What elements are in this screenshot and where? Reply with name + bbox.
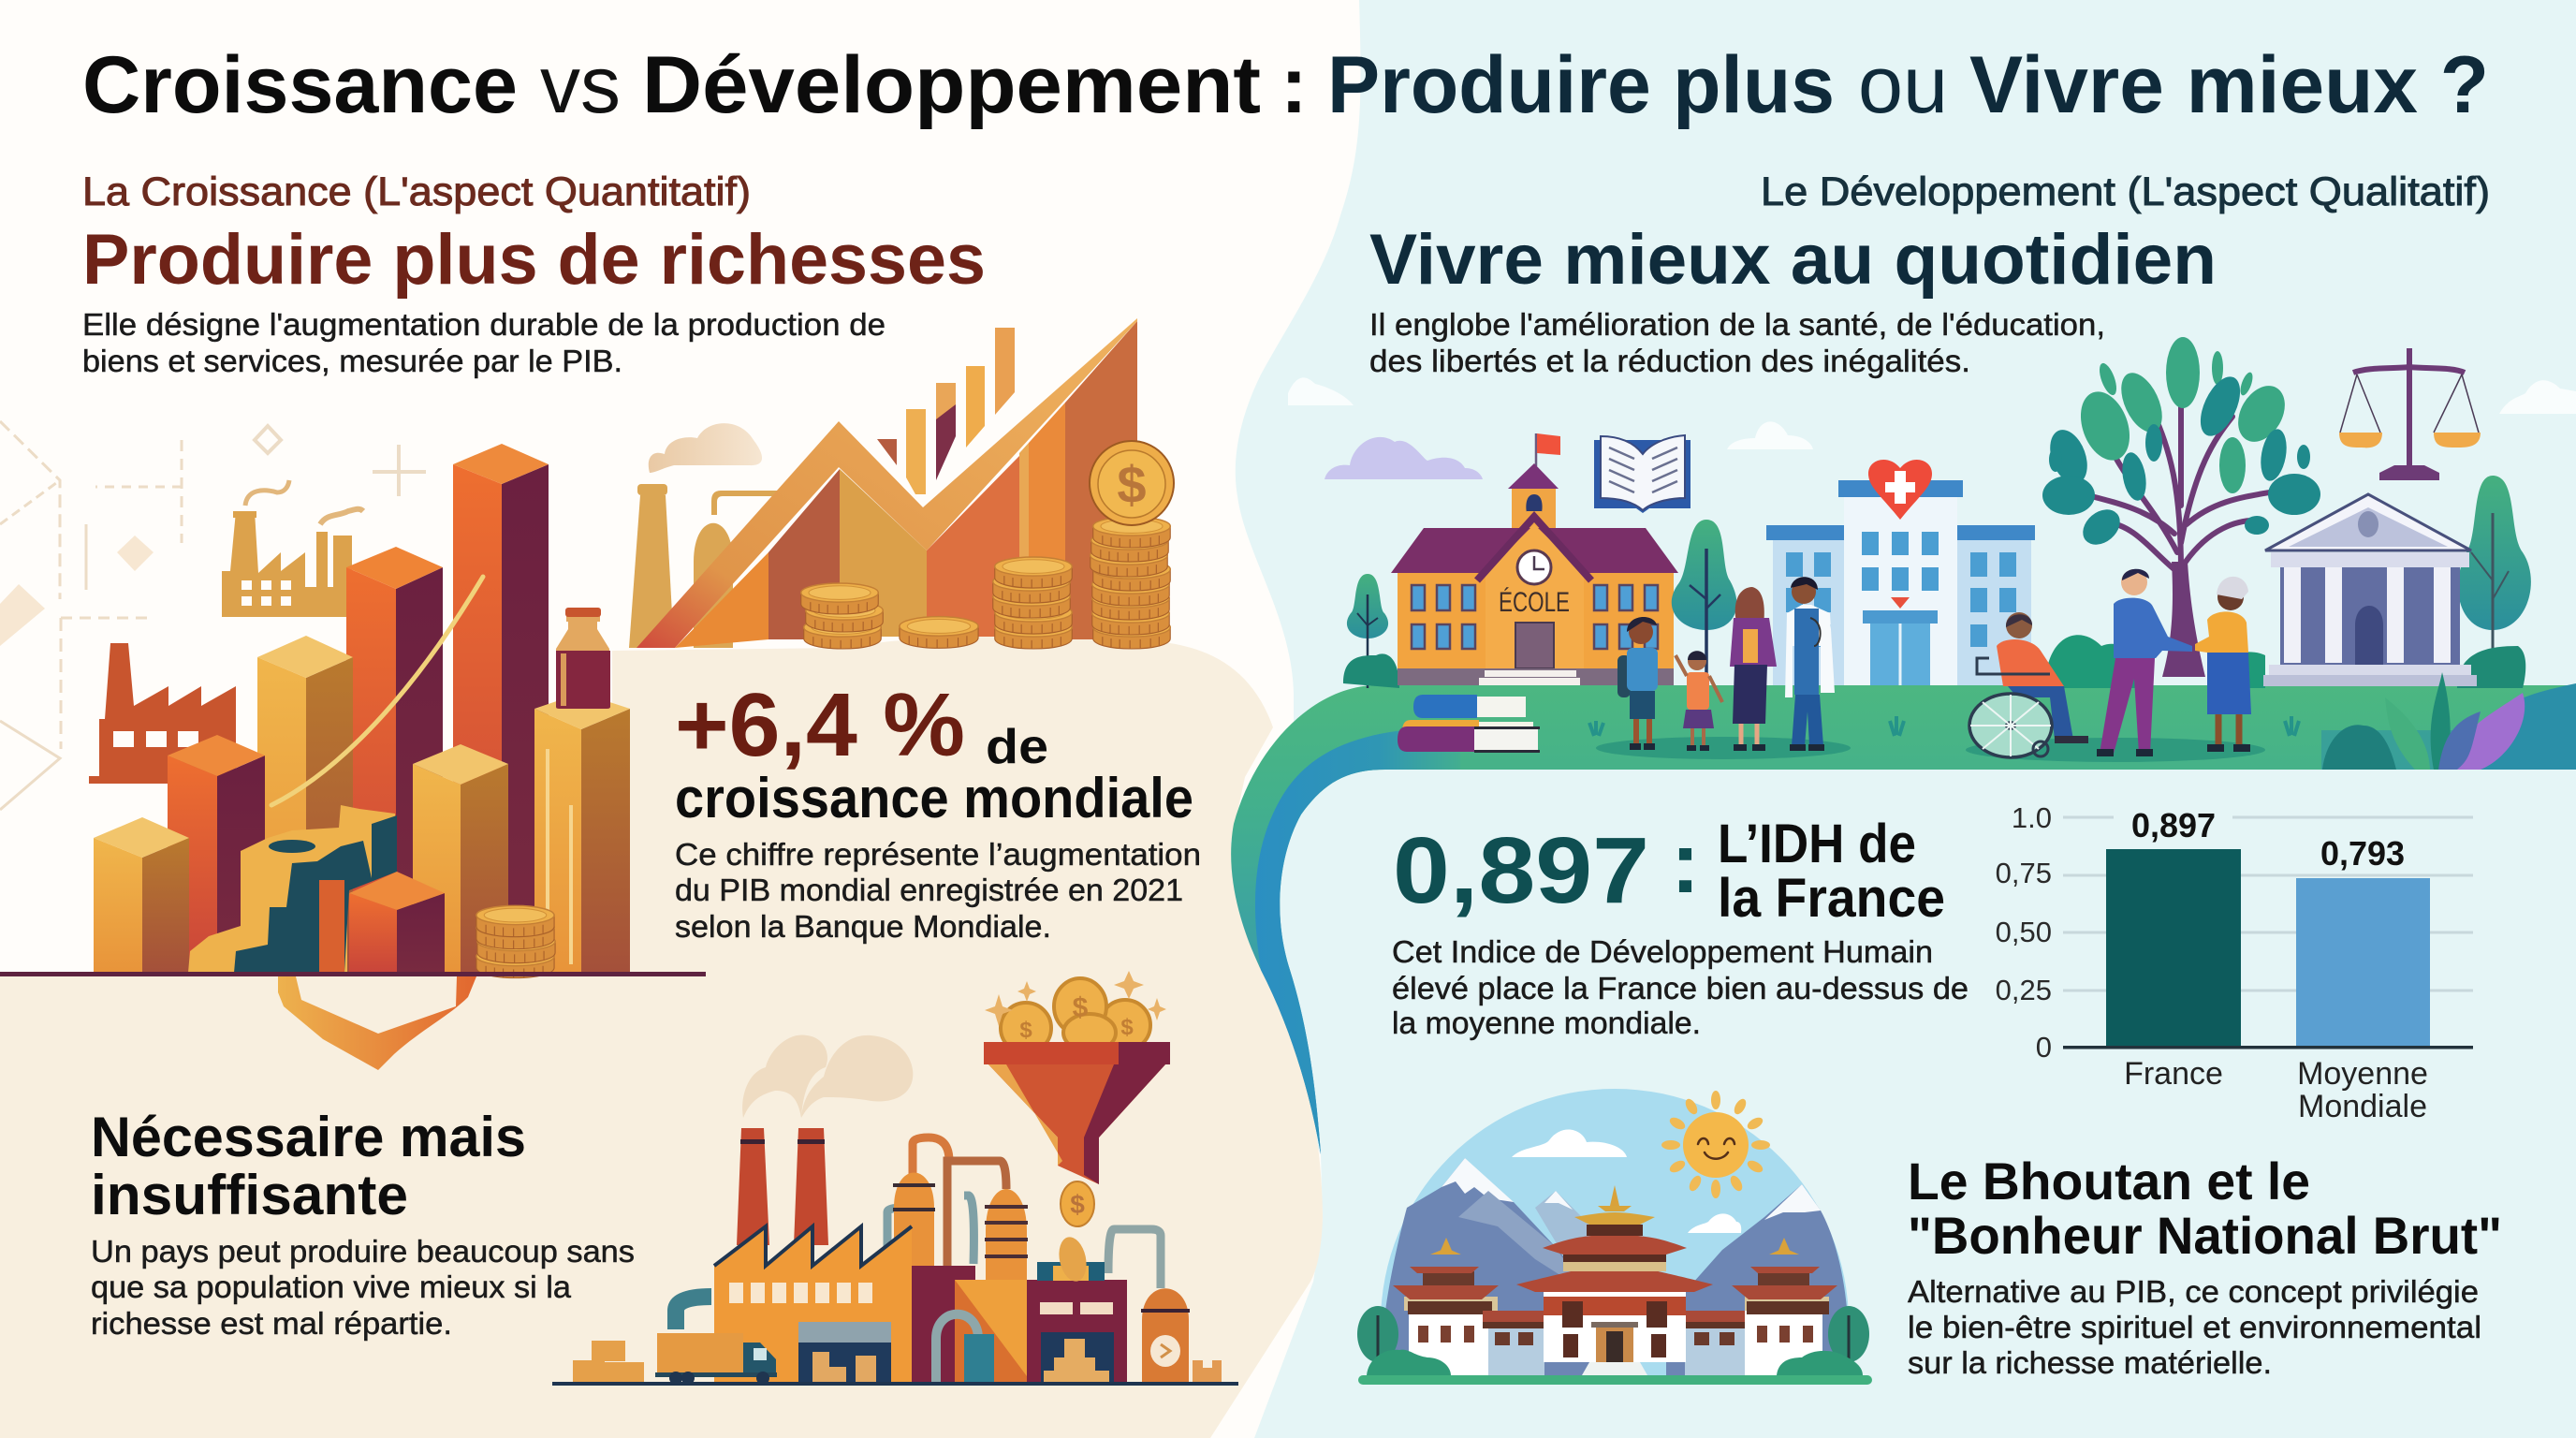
decor: pale diamonds xyxy=(0,536,154,646)
bar: orange front left xyxy=(168,735,265,973)
boxes xyxy=(573,1341,1222,1382)
walls xyxy=(1398,573,1674,668)
right illustration: clouds xyxy=(1288,377,2576,479)
tanks xyxy=(893,1172,1028,1280)
back areas of arrow xyxy=(1065,321,1137,639)
title: ou xyxy=(1858,40,1948,130)
text block: nécessaire mais insuffisante: Un pays peut produire beaucoup sans xyxy=(91,1235,635,1269)
hospital wings xyxy=(1773,538,1844,685)
hill bottom shade xyxy=(2321,730,2576,770)
bar: second orange xyxy=(346,547,443,973)
falling coin xyxy=(1061,1181,1094,1226)
illustration: grass tufts xyxy=(1589,716,2299,736)
figure: standing man xyxy=(2097,569,2192,756)
illustration: small tree left xyxy=(1343,574,1399,688)
funnel xyxy=(984,1042,1170,1184)
zigzag arrow band xyxy=(637,318,1137,648)
coins in funnel: $ xyxy=(1120,1015,1134,1040)
title: Croissance xyxy=(82,40,518,130)
pipes xyxy=(676,1137,1161,1329)
background: right pale blue side xyxy=(1231,0,2576,1438)
text block: Bhoutan: sur la richesse matérielle. xyxy=(1908,1346,2272,1381)
clouds xyxy=(1512,1129,1627,1157)
text block: Bhoutan: le bien-être spirituel et environnemental xyxy=(1908,1311,2481,1345)
small rising bars xyxy=(877,328,1015,494)
bar: small orange front xyxy=(349,872,445,973)
text block: Bhoutan: Alternative au PIB, ce concept privilégie xyxy=(1908,1275,2479,1310)
illustration: foliage bottom right xyxy=(2322,672,2576,770)
falling coin: $ xyxy=(1070,1190,1085,1219)
title: Produire plus xyxy=(1327,40,1835,130)
illustration: school xyxy=(1391,433,1678,685)
illustration: tree middle xyxy=(1672,520,1736,688)
figure: woman xyxy=(1730,587,1777,751)
central gold and teal shape xyxy=(188,805,397,973)
right heading block: Vivre mieux au quotidien xyxy=(1369,220,2217,300)
left heading block: Produire plus de richesses xyxy=(82,220,986,300)
right wing building xyxy=(1685,1238,1837,1375)
text block: nécessaire mais insuffisante: que sa population vive mieux si la xyxy=(91,1270,571,1305)
stat: +6,4 %: de xyxy=(986,720,1048,774)
figure: girl with backpack xyxy=(1617,617,1658,750)
hill inner blue strip xyxy=(1255,728,1460,1154)
left heading block xyxy=(82,169,986,379)
bar: gold back xyxy=(257,636,353,973)
truck xyxy=(655,1333,777,1385)
figure: child xyxy=(1676,651,1722,751)
bar: moyenne mondiale xyxy=(2296,878,2430,1048)
windows xyxy=(1412,585,1658,649)
illustration: big tree xyxy=(2042,337,2320,677)
text block: nécessaire mais insuffisante: insuffisante xyxy=(91,1164,408,1226)
category labels: Mondiale xyxy=(2298,1089,2427,1124)
y axis labels: 1.0 xyxy=(2012,801,2052,834)
text block: nécessaire mais insuffisante: richesse est mal répartie. xyxy=(91,1307,452,1342)
ground bar xyxy=(1358,1375,1872,1385)
ground line xyxy=(0,972,706,976)
figure: doctor xyxy=(1785,577,1835,751)
sparkles xyxy=(985,971,1166,1026)
icon: open book xyxy=(1594,435,1690,513)
stat: 0,897 IDH: Cet Indice de Développement Humain xyxy=(1392,935,1933,970)
connecting wing left xyxy=(1483,1311,1544,1375)
illustration: people shaking hands and wheelchair xyxy=(1966,569,2265,762)
value labels: 0,793 xyxy=(2320,834,2405,873)
icon: dollar coin: $ xyxy=(1117,455,1147,514)
category labels xyxy=(2124,1056,2428,1124)
title: Développement xyxy=(642,40,1261,130)
icon: heart with cross xyxy=(1868,460,1932,520)
bottle xyxy=(556,608,610,709)
coins in funnel xyxy=(1001,978,1150,1053)
illustration: factory with funnel xyxy=(552,971,1238,1386)
right heading block: des libertés et la réduction des inégalités. xyxy=(1369,345,1970,379)
illustration: gold factory silhouette xyxy=(222,480,363,617)
clock xyxy=(1517,550,1551,584)
school label: ÉCOLE xyxy=(1499,587,1570,618)
coin container on roof xyxy=(1037,1235,1105,1284)
coin stack xyxy=(476,905,555,978)
coins in funnel: $ xyxy=(1073,992,1089,1023)
plum block xyxy=(912,1266,975,1384)
hospital main block xyxy=(1844,496,1957,685)
title: vs xyxy=(540,40,621,130)
illustration: right tree xyxy=(2457,476,2531,688)
single coin xyxy=(900,617,978,648)
coin stack 3 xyxy=(1090,517,1170,649)
title: Vivre mieux ? xyxy=(1969,40,2489,130)
factory ground line xyxy=(552,1382,1238,1386)
y axis labels: 0,75 xyxy=(1996,857,2052,889)
coins in funnel: $ xyxy=(1019,1018,1032,1043)
coin stack 2 xyxy=(993,557,1072,649)
stat: 0,897 IDH: : xyxy=(1671,814,1700,911)
arrow shield below the bars xyxy=(278,976,476,1070)
tower xyxy=(1512,489,1556,545)
growth curve xyxy=(271,577,483,805)
left heading block: biens et services, mesurée par le PIB. xyxy=(82,345,622,379)
illustration: temple with columns xyxy=(2263,494,2477,686)
main building xyxy=(714,1226,912,1384)
right heading block: Le Développement (L'aspect Qualitatif) xyxy=(1761,169,2490,214)
bar: gold middle xyxy=(413,744,508,973)
left wing building xyxy=(1393,1238,1540,1375)
bar: gold front left xyxy=(94,817,189,973)
chimneys xyxy=(737,1128,828,1245)
stat: +6,4 % xyxy=(675,675,1201,945)
value labels xyxy=(2131,806,2405,873)
illustration: book stack xyxy=(1398,695,1540,753)
text block: nécessaire mais insuffisante xyxy=(91,1106,635,1342)
category labels: Moyenne xyxy=(2297,1056,2428,1092)
hill ribbon xyxy=(1231,685,2576,1154)
stat: +6,4 %: selon la Banque Mondiale. xyxy=(675,910,1051,945)
bar: gold right xyxy=(534,693,630,973)
stat: 0,897 IDH xyxy=(1392,814,1969,1041)
stat: 0,897 IDH: 0,897 xyxy=(1393,818,1649,923)
stat: +6,4 %: du PIB mondial enregistrée en 2021 xyxy=(675,873,1183,908)
illustration: Bhutan dzong xyxy=(1357,1089,1872,1385)
stat: 0,897 IDH: la moyenne mondiale. xyxy=(1392,1006,1701,1041)
background: geometric dashed decoration xyxy=(0,421,426,810)
background: cream panel xyxy=(0,636,1323,1438)
smoke cloud xyxy=(649,423,762,473)
illustration: family and doctor group xyxy=(1596,577,1851,759)
leaves xyxy=(2071,337,2294,493)
y axis labels: 0 xyxy=(2036,1031,2052,1064)
illustration: red factory silhouette xyxy=(89,643,236,784)
text block: Bhoutan xyxy=(1908,1152,2502,1381)
figure: elderly woman xyxy=(2195,577,2251,752)
title xyxy=(82,40,2489,130)
y axis labels xyxy=(1996,801,2052,1064)
text block: nécessaire mais insuffisante: Nécessaire mais xyxy=(91,1106,526,1168)
coin stack 1 xyxy=(801,583,883,649)
stat: 0,897 IDH: L’IDH de xyxy=(1718,814,1916,874)
trees and bushes xyxy=(1357,1306,1869,1375)
left heading block: Elle désigne l'augmentation durable de la production de xyxy=(82,308,886,343)
illustration: hospital xyxy=(1766,460,2035,685)
plum building xyxy=(1027,1280,1127,1384)
stat: +6,4 %: croissance mondiale xyxy=(675,767,1193,829)
figure: wheelchair user xyxy=(1969,612,2088,757)
stat: +6,4 %: Ce chiffre représente l’augmentation xyxy=(675,838,1201,873)
illustration: rising arrow chart xyxy=(629,318,1174,649)
stat: 0,897 IDH: la France xyxy=(1718,868,1945,929)
stat: 0,897 IDH: élevé place la France bien au-dessus de xyxy=(1392,972,1969,1006)
icon: scales of justice xyxy=(2339,348,2481,480)
illustration: bushes xyxy=(2045,635,2265,688)
right tank xyxy=(1141,1288,1190,1383)
sky dome xyxy=(1381,1089,1849,1375)
bar: France xyxy=(2106,849,2241,1048)
roof xyxy=(1391,528,1678,573)
icon: dollar coin xyxy=(1090,441,1174,525)
y axis labels: 0,25 xyxy=(1996,974,2052,1006)
y axis labels: 0,50 xyxy=(1996,916,2052,948)
left heading block: La Croissance (L'aspect Quantitatif) xyxy=(82,169,751,214)
gold building xyxy=(936,1280,1027,1384)
refinery xyxy=(629,484,777,648)
title: : xyxy=(1281,40,1308,130)
bar: tallest orange xyxy=(453,444,549,973)
central tower xyxy=(1516,1185,1713,1375)
right heading block: Il englobe l'amélioration de la santé, de l'éducation, xyxy=(1369,308,2105,343)
mountains xyxy=(1381,1158,1849,1375)
text block: Bhoutan: Le Bhoutan et le xyxy=(1908,1152,2310,1211)
stairs xyxy=(1479,670,1580,685)
category labels: France xyxy=(2124,1056,2223,1092)
trunk and branches xyxy=(2162,562,2205,677)
text block: Bhoutan: "Bonheur National Brut" xyxy=(1908,1206,2502,1265)
bar chart: IDH France vs moyenne mondiale xyxy=(1996,801,2473,1124)
flag xyxy=(1537,433,1560,455)
stat: +6,4 %: +6,4 % xyxy=(675,675,965,775)
smoke xyxy=(742,1034,913,1118)
icon: smiling sun xyxy=(1661,1091,1770,1198)
value labels: 0,897 xyxy=(2131,806,2216,844)
right heading block xyxy=(1369,169,2490,379)
illustration: 3D bar chart xyxy=(94,444,630,978)
